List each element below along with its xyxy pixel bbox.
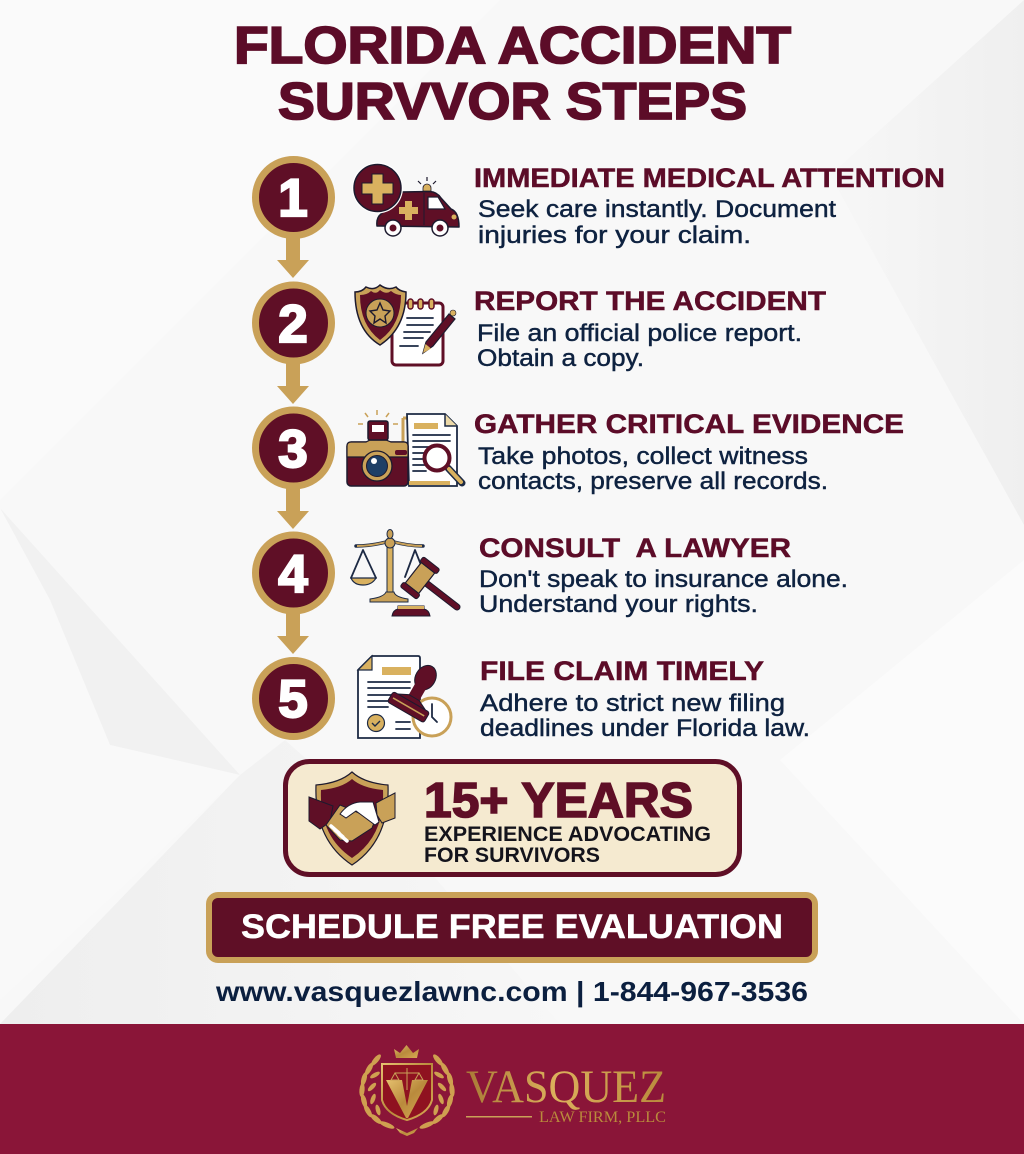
logo: wordmark: VASQUEZ xyxy=(466,1061,666,1113)
footer band xyxy=(0,1024,1024,1154)
step 5 text: deadlines under Florida law. xyxy=(480,715,810,742)
icon: shield with handshake xyxy=(309,772,395,865)
step 1 text xyxy=(474,163,945,249)
step 2 text: Obtain a copy. xyxy=(477,345,644,372)
logo: crest xyxy=(359,1045,455,1136)
step 5 text: FILE CLAIM TIMELY xyxy=(480,656,764,686)
arrow: step 3 to 4 xyxy=(277,487,309,529)
title: SURVVOR STEPS xyxy=(278,73,747,131)
step 1 text: Seek care instantly. Document xyxy=(478,196,836,223)
number badge 1: 1 xyxy=(278,169,308,228)
call to action button: SCHEDULE FREE EVALUATION xyxy=(241,908,783,946)
step 2 text xyxy=(474,286,827,372)
step 3 text xyxy=(474,409,904,495)
step 4 text: CONSULT A LAWYER xyxy=(479,533,791,563)
experience text: FOR SURVIVORS xyxy=(424,844,600,867)
experience text xyxy=(424,774,711,867)
step 2 text: REPORT THE ACCIDENT xyxy=(474,286,827,316)
number badge 5: 5 xyxy=(278,670,308,729)
experience text: 15+ YEARS xyxy=(424,774,693,828)
call to action button xyxy=(209,895,815,960)
icon: document with stamp and clock xyxy=(358,656,451,738)
step 3 text: GATHER CRITICAL EVIDENCE xyxy=(474,409,904,439)
experience text: EXPERIENCE ADVOCATING xyxy=(424,823,711,846)
arrow: step 4 to 5 xyxy=(277,612,309,654)
step 1 text: IMMEDIATE MEDICAL ATTENTION xyxy=(474,163,945,193)
step 3 text: contacts, preserve all records. xyxy=(478,468,828,495)
number badge 3: 3 xyxy=(278,420,308,479)
step 5 text xyxy=(480,656,810,742)
arrow: step 2 to 3 xyxy=(277,362,309,404)
icon: scales of justice and gavel xyxy=(351,530,457,616)
arrow: step 1 to 2 xyxy=(277,236,309,278)
title: FLORIDA ACCIDENT xyxy=(234,17,791,75)
step 4 text: Understand your rights. xyxy=(479,591,758,618)
icon: ambulance xyxy=(352,162,459,236)
number badge 4: 4 xyxy=(278,545,308,604)
number badge 1 xyxy=(256,160,332,236)
experience panel xyxy=(286,762,740,874)
title xyxy=(234,17,791,131)
logo: wordmark: LAW FIRM, PLLC xyxy=(539,1109,666,1126)
number badge 3 xyxy=(256,410,332,486)
step 3 text: Take photos, collect witness xyxy=(478,443,808,470)
number badge 4 xyxy=(256,535,332,611)
icon: camera and document with magnifier xyxy=(347,410,462,486)
number badge 5 xyxy=(256,660,332,736)
contact line: www.vasquezlawnc.com | 1-844-967-3536 xyxy=(215,976,808,1007)
number badge 2: 2 xyxy=(278,295,308,354)
number badge 2 xyxy=(256,285,332,361)
step 5 text: Adhere to strict new filing xyxy=(480,690,785,717)
step 2 text: File an official police report. xyxy=(477,320,802,347)
icon: police badge and clipboard xyxy=(355,285,456,365)
step 4 text: Don't speak to insurance alone. xyxy=(479,566,848,593)
step 4 text xyxy=(479,533,848,618)
step 1 text: injuries for your claim. xyxy=(478,222,751,249)
